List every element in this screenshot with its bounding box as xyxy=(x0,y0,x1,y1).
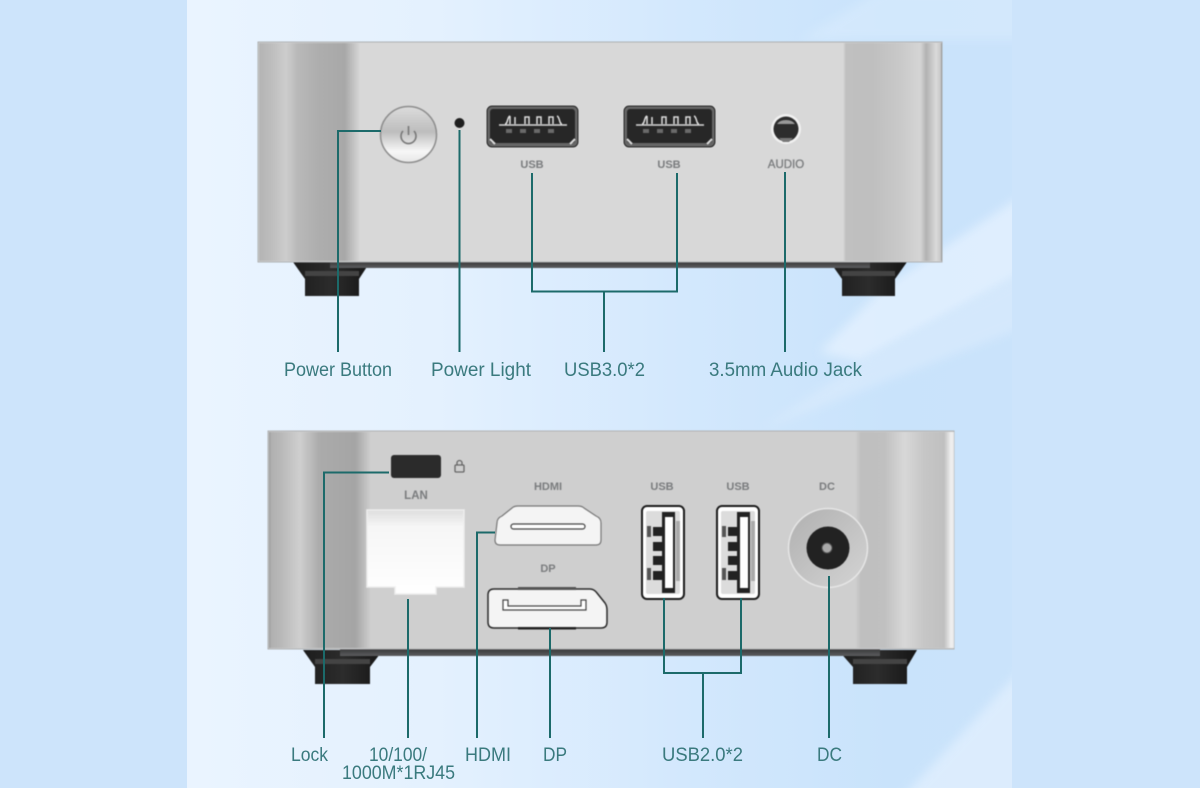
label: HDMI: HDMI xyxy=(465,745,511,766)
DC label: DC xyxy=(819,481,835,493)
rear right corner shading xyxy=(855,432,954,648)
front base strip xyxy=(330,261,870,268)
label: LAN speed: 1000M*1RJ45 xyxy=(342,763,455,784)
device: front view xyxy=(258,42,942,296)
label: Power Button: Power Button xyxy=(284,360,392,381)
label: USB3.0*2: USB3.0*2 xyxy=(564,360,645,381)
front left corner shading xyxy=(259,43,360,261)
rear foot right xyxy=(838,650,917,684)
label: Power Light: Power Light xyxy=(431,360,532,381)
front chassis xyxy=(258,42,942,262)
front foot right xyxy=(830,262,907,296)
device: rear view xyxy=(268,431,954,684)
USB port 2 xyxy=(623,105,716,148)
rear foot left xyxy=(303,650,383,684)
audio jack xyxy=(771,114,801,144)
USB label 1: USB xyxy=(520,159,544,171)
power light xyxy=(454,118,464,128)
background panel xyxy=(187,0,1030,788)
DP port xyxy=(488,587,607,630)
label: 3.5mm Audio Jack: 3.5mm Audio Jack xyxy=(709,360,862,381)
front right corner shading xyxy=(843,43,942,261)
rear chassis xyxy=(268,431,954,649)
rear left corner shading xyxy=(269,432,371,648)
LAN port xyxy=(367,510,464,594)
USB port 1 xyxy=(486,105,579,148)
USB label 4: USB xyxy=(726,481,750,493)
label: DP: DP xyxy=(543,745,567,766)
lock slot xyxy=(391,455,441,478)
callout lines: rear xyxy=(324,472,829,738)
lock icon xyxy=(455,460,464,472)
callout lines: front xyxy=(338,130,785,352)
label: USB2.0*2: USB2.0*2 xyxy=(662,745,743,766)
USB port 3 xyxy=(642,506,684,599)
USB label 2: USB xyxy=(657,159,681,171)
HDMI label: HDMI xyxy=(534,481,562,493)
front foot left xyxy=(293,262,370,296)
USB label 3: USB xyxy=(650,481,674,493)
USB port 4 xyxy=(717,506,759,599)
label: Lock: Lock xyxy=(291,745,328,766)
rear base strip xyxy=(340,648,880,656)
HDMI port xyxy=(495,506,601,545)
label: LAN speed: 10/100/ xyxy=(369,745,428,766)
label: DC: DC xyxy=(817,745,842,766)
DC jack xyxy=(788,508,868,588)
LAN label: LAN xyxy=(404,490,428,502)
DP label: DP xyxy=(540,563,556,575)
label: LAN speed xyxy=(342,745,455,784)
audio label: AUDIO xyxy=(768,159,804,171)
power button xyxy=(380,106,436,162)
